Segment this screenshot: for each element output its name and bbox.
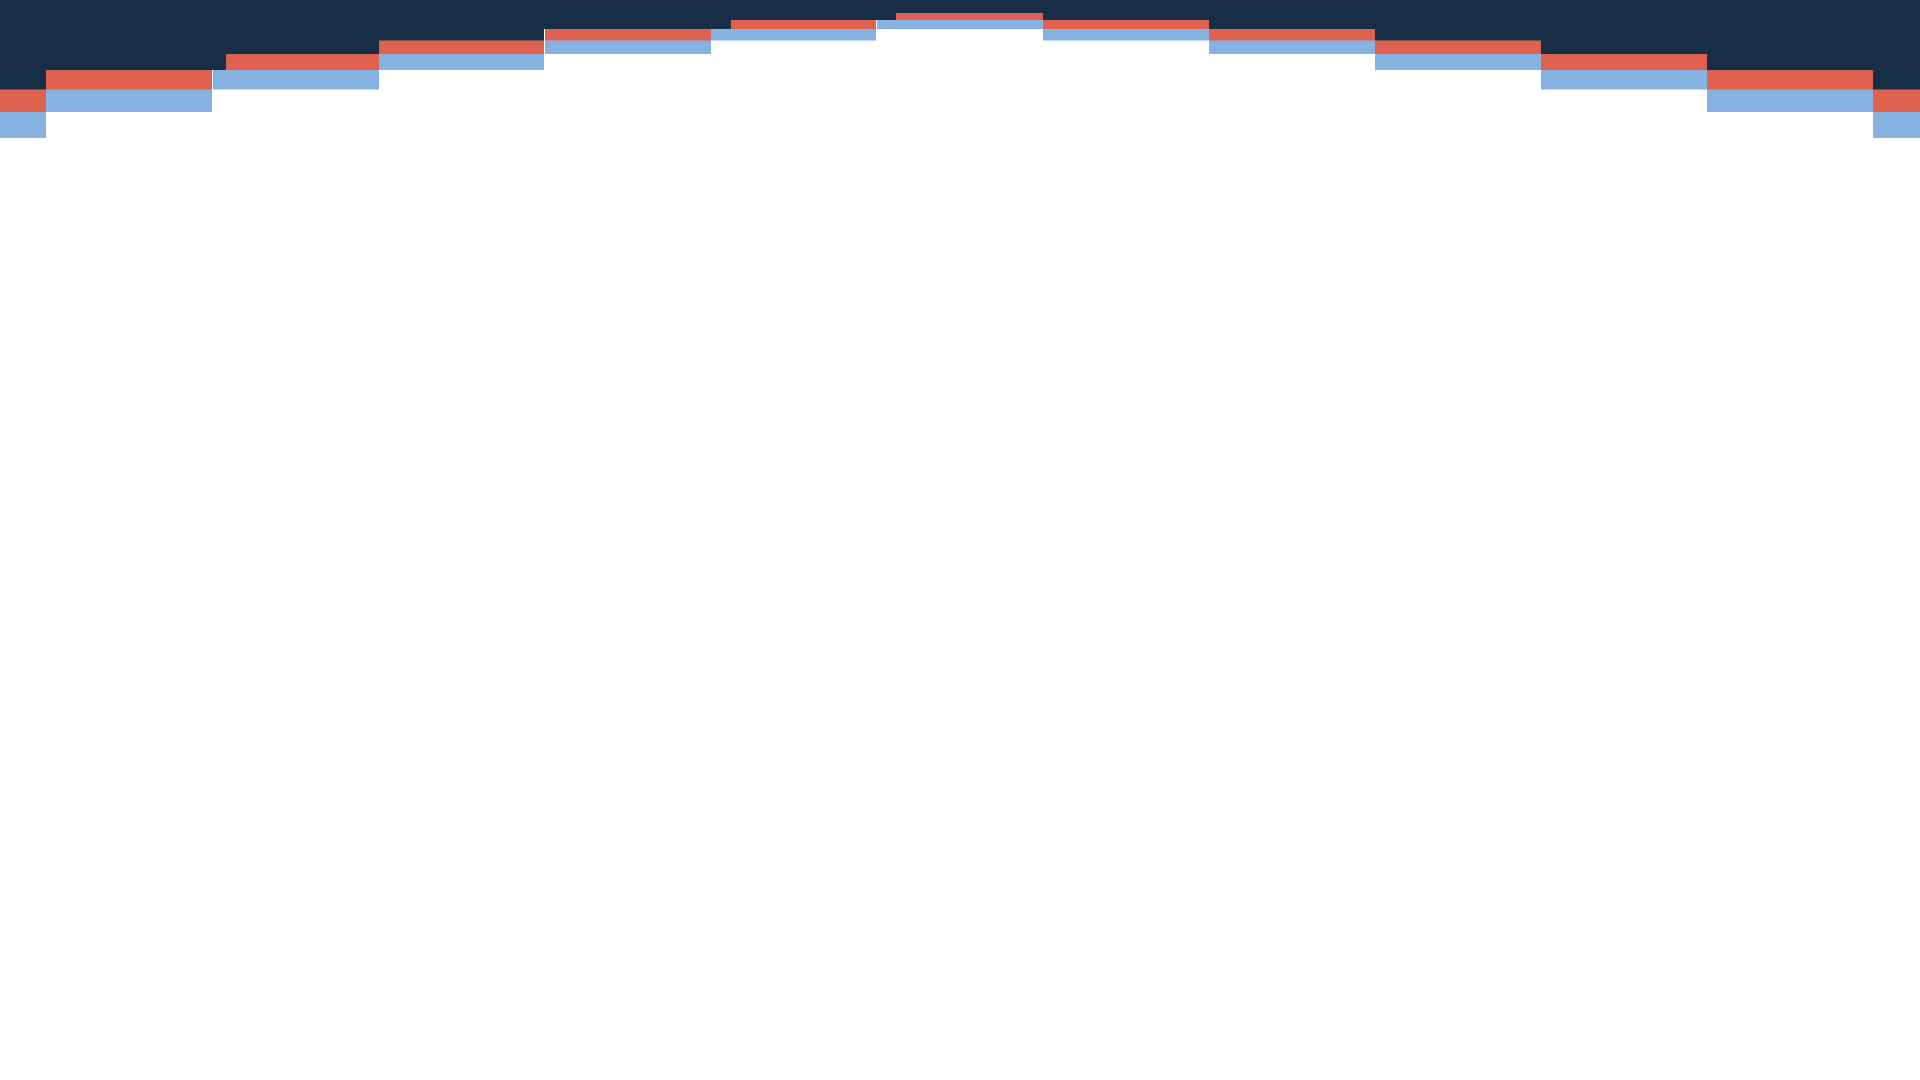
blue steps xyxy=(0,20,1920,138)
white separators between steps xyxy=(212,20,877,90)
navy top band xyxy=(0,0,1920,90)
red steps xyxy=(0,13,1920,113)
